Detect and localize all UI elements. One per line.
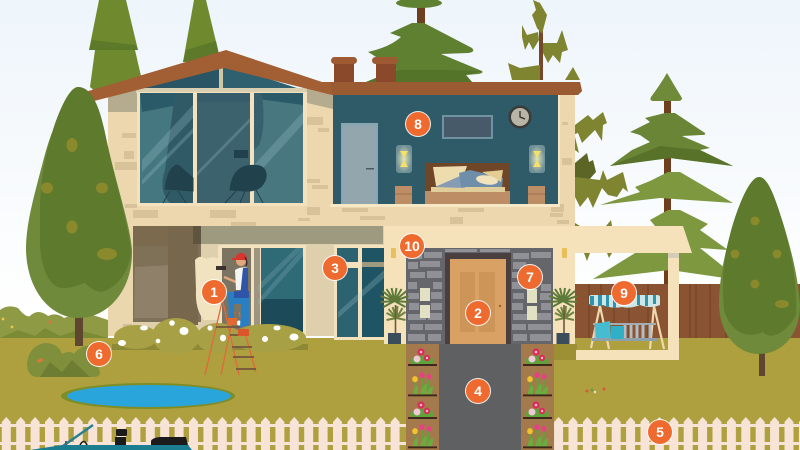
front door: [445, 253, 511, 344]
left wall sconce: [396, 145, 412, 173]
marker 6: [86, 341, 112, 367]
right stone wall lights: [527, 289, 537, 320]
marker 7: [517, 264, 543, 290]
porch ceiling and ground floor: [108, 226, 384, 336]
marker 2: [465, 300, 491, 326]
picket fence right: [553, 417, 800, 450]
marker 3: [322, 255, 348, 281]
tulip planter: [408, 372, 437, 396]
convertible car: [30, 425, 192, 450]
right pillar lamp: [562, 248, 567, 258]
chair silhouettes: [163, 150, 266, 203]
lawn flowers: [586, 388, 606, 393]
marker 8: [405, 111, 431, 137]
wall clock: [508, 106, 532, 128]
right pine tree: [593, 73, 733, 328]
marker 5: 5: [656, 424, 664, 440]
left pillar lamp: [391, 248, 396, 258]
insulation foam patch: [195, 257, 222, 320]
wall screen: [442, 115, 493, 139]
rosette planter: [408, 348, 437, 366]
central pine tree: [366, 0, 482, 82]
marker 1: [201, 279, 227, 305]
roof: [85, 50, 582, 102]
background hedge: [0, 306, 108, 340]
marker 6: 6: [95, 346, 103, 362]
porch beam: [384, 226, 692, 344]
right potted plant: [549, 288, 577, 344]
marker 1: 1: [210, 284, 218, 300]
garden swing: [589, 295, 664, 349]
front path: [439, 344, 521, 450]
left potted plant: [380, 288, 408, 344]
back fence: [575, 284, 800, 358]
left nightstand: [395, 186, 412, 204]
rosette planter: [523, 401, 552, 419]
curtains and reflections: [142, 93, 303, 203]
pond: [61, 383, 235, 409]
bedroom door: [341, 123, 378, 204]
marker 3: 3: [331, 260, 339, 276]
bedroom: [330, 95, 560, 207]
chimneys: [331, 57, 398, 83]
right wall sconce: [529, 145, 545, 173]
rosette planter: [523, 348, 552, 366]
front flower hedge: [112, 318, 308, 354]
pine tree far left: [89, 0, 141, 92]
head and cap: [232, 253, 247, 266]
marker 10: [399, 233, 425, 259]
marker 7: 7: [526, 269, 534, 285]
marker 5: [647, 419, 673, 445]
right large tree: [719, 177, 800, 376]
shrub: [27, 343, 100, 377]
picket fence left: [0, 417, 406, 450]
spray tool: [216, 266, 226, 270]
swing pergola: [576, 253, 679, 360]
worker: [216, 253, 249, 336]
right nightstand: [528, 186, 545, 204]
house upper wall: [108, 84, 575, 228]
gable glass: [136, 64, 307, 93]
lawn strip beside the porch: [553, 344, 577, 360]
rosette planter: [408, 401, 437, 419]
olive fir tree behind house: [508, 0, 628, 261]
right flower bed: [521, 344, 554, 450]
ladder: [205, 302, 256, 375]
tulip planter: [523, 372, 552, 396]
pine tree behind roof: [183, 0, 220, 62]
large upstairs window: [136, 64, 307, 206]
marker 10: 10: [404, 238, 420, 254]
stone wall: [406, 248, 553, 344]
marker 9: 9: [620, 285, 628, 301]
left large tree: [26, 87, 132, 346]
marker 8: 8: [414, 116, 422, 132]
side window: [334, 245, 384, 340]
bed: [425, 163, 510, 204]
marker 2: 2: [474, 305, 482, 321]
marker 4: 4: [474, 383, 482, 399]
marker 9: [611, 280, 637, 306]
left flower bed: [406, 344, 439, 450]
tulip planter: [523, 424, 552, 448]
tulip planter: [408, 424, 437, 448]
marker 4: [465, 378, 491, 404]
lawn: [0, 338, 800, 450]
left stone wall lights: [420, 288, 430, 318]
sliding door: [218, 245, 306, 338]
